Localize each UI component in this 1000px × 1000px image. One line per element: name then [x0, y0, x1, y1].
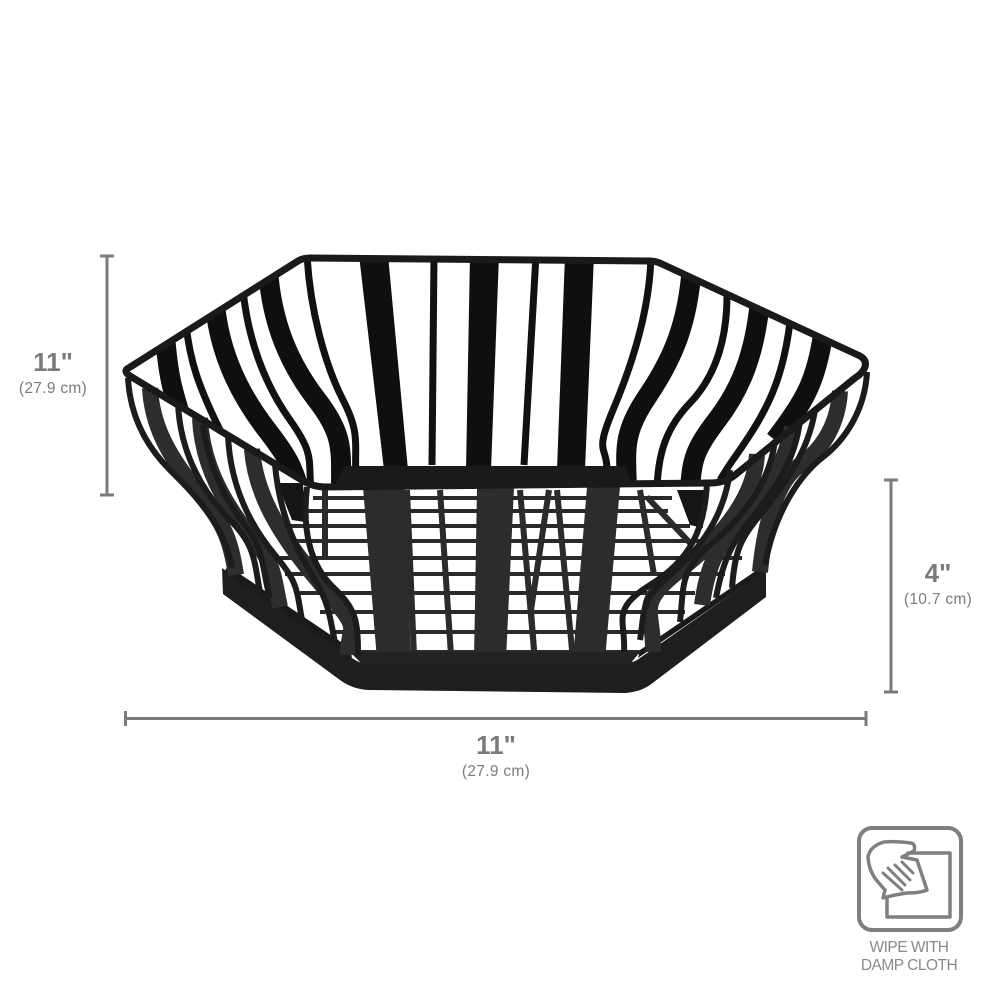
- back straight strips: [359, 255, 594, 470]
- width label: 11": [476, 730, 516, 760]
- front wires: [325, 490, 690, 655]
- basket base: [222, 568, 766, 693]
- hand outline: [868, 842, 915, 890]
- left side flared bars: [128, 378, 358, 655]
- cloth under hand: [883, 851, 927, 898]
- front bottom band: [350, 652, 640, 664]
- front wall: [325, 487, 690, 664]
- base inner lip: [224, 566, 764, 658]
- back straight wires: [432, 255, 536, 465]
- base height label: [904, 558, 972, 608]
- right flared wires: [622, 372, 867, 652]
- base height dimension line: [884, 480, 898, 692]
- icon: wipe with damp cloth: [859, 828, 961, 930]
- height label: [19, 347, 87, 397]
- width dimension line: [126, 711, 866, 726]
- back wall bars: [165, 255, 823, 490]
- basket product illustration: [126, 255, 867, 693]
- icon frame: [859, 828, 961, 930]
- care instruction text: DAMP CLOTH: [861, 957, 957, 974]
- care instruction text: [861, 939, 957, 974]
- width label: (27.9 cm): [462, 763, 530, 780]
- back right curved strips: [626, 265, 823, 490]
- height label: 11": [33, 347, 73, 377]
- fingers: [883, 862, 913, 890]
- height dimension line: [100, 256, 114, 495]
- base height label: (10.7 cm): [904, 591, 972, 608]
- back floor band: [335, 466, 632, 485]
- base height label: 4": [925, 558, 951, 588]
- back left curved wires: [186, 255, 356, 490]
- height label: (27.9 cm): [19, 380, 87, 397]
- back right curved wires: [603, 255, 790, 490]
- left flared wires: [128, 378, 358, 655]
- right side flared bars: [622, 372, 867, 652]
- right flared strips: [650, 391, 840, 652]
- front flat strips: [363, 487, 620, 660]
- dark back strips seen through the front: [277, 483, 704, 528]
- left flared strips: [150, 388, 351, 655]
- cloth square: [887, 853, 950, 917]
- back left curved strips: [165, 270, 341, 490]
- width label: [462, 730, 530, 780]
- care instruction text: WIPE WITH: [869, 939, 949, 956]
- top rim: [126, 258, 865, 487]
- basket floor wires: [280, 498, 742, 652]
